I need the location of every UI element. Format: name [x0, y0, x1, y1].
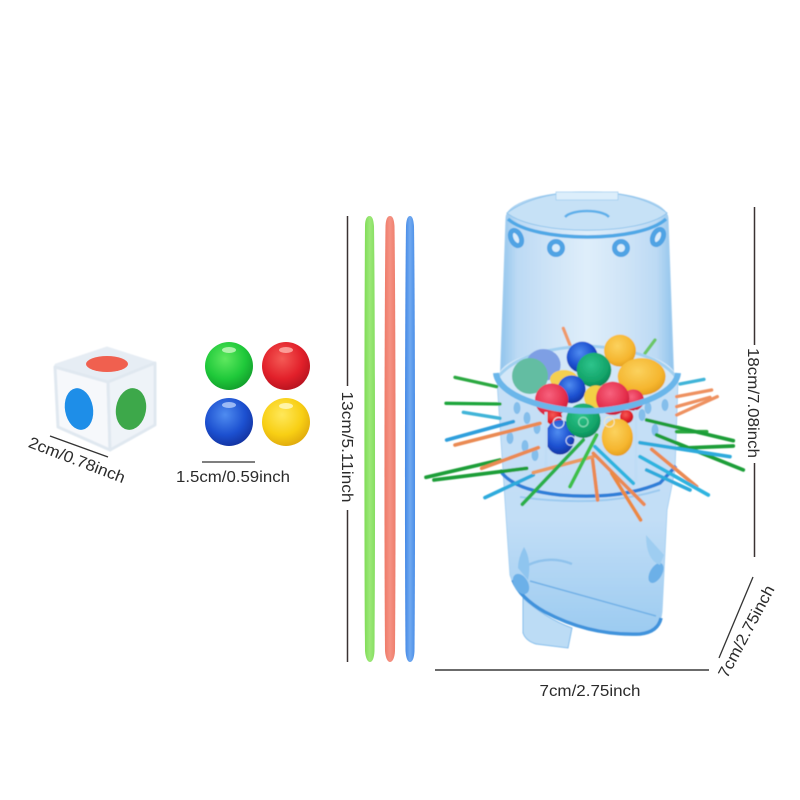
tower width label: 7cm/2.75inch	[540, 683, 640, 700]
bead size label: 1.5cm/0.59inch	[176, 469, 290, 486]
die size label: 2cm/0.78inch	[26, 435, 127, 487]
base foot	[523, 598, 572, 648]
cup top rim	[507, 192, 667, 237]
blue stick	[405, 216, 415, 662]
red bead	[262, 342, 310, 390]
base ramp	[509, 535, 667, 634]
collar interior	[497, 346, 677, 409]
tower width line	[435, 669, 709, 671]
die body	[55, 348, 155, 450]
panel: game tower	[426, 192, 743, 648]
marbles	[512, 335, 666, 456]
panel: three sticks	[364, 216, 415, 662]
red stick	[384, 216, 396, 662]
green bead	[205, 342, 253, 390]
die green dot	[113, 386, 149, 432]
tower depth line	[719, 577, 753, 658]
cup hanging loops	[508, 228, 666, 254]
tower height label: 18cm/7.08inch	[744, 348, 761, 458]
front sticks	[426, 420, 743, 520]
panel: four beads	[205, 342, 310, 446]
tower depth label: 7cm/2.75inch	[716, 583, 778, 681]
upper cup	[500, 192, 674, 385]
stick length label: 13cm/5.11inch	[338, 392, 355, 502]
collar ring and window panels	[496, 373, 678, 482]
lower cylinder and base	[497, 380, 678, 634]
die size line	[50, 436, 108, 457]
stick length line	[346, 216, 348, 662]
lower ring	[500, 466, 676, 501]
die blue dot	[62, 386, 96, 432]
bead size line	[202, 461, 255, 463]
blue bead	[205, 398, 253, 446]
die red dot	[86, 356, 128, 372]
back sticks	[446, 328, 717, 418]
yellow bead	[262, 398, 310, 446]
panel: colour die	[55, 348, 155, 450]
tower height line	[754, 207, 756, 557]
green stick	[364, 216, 375, 662]
